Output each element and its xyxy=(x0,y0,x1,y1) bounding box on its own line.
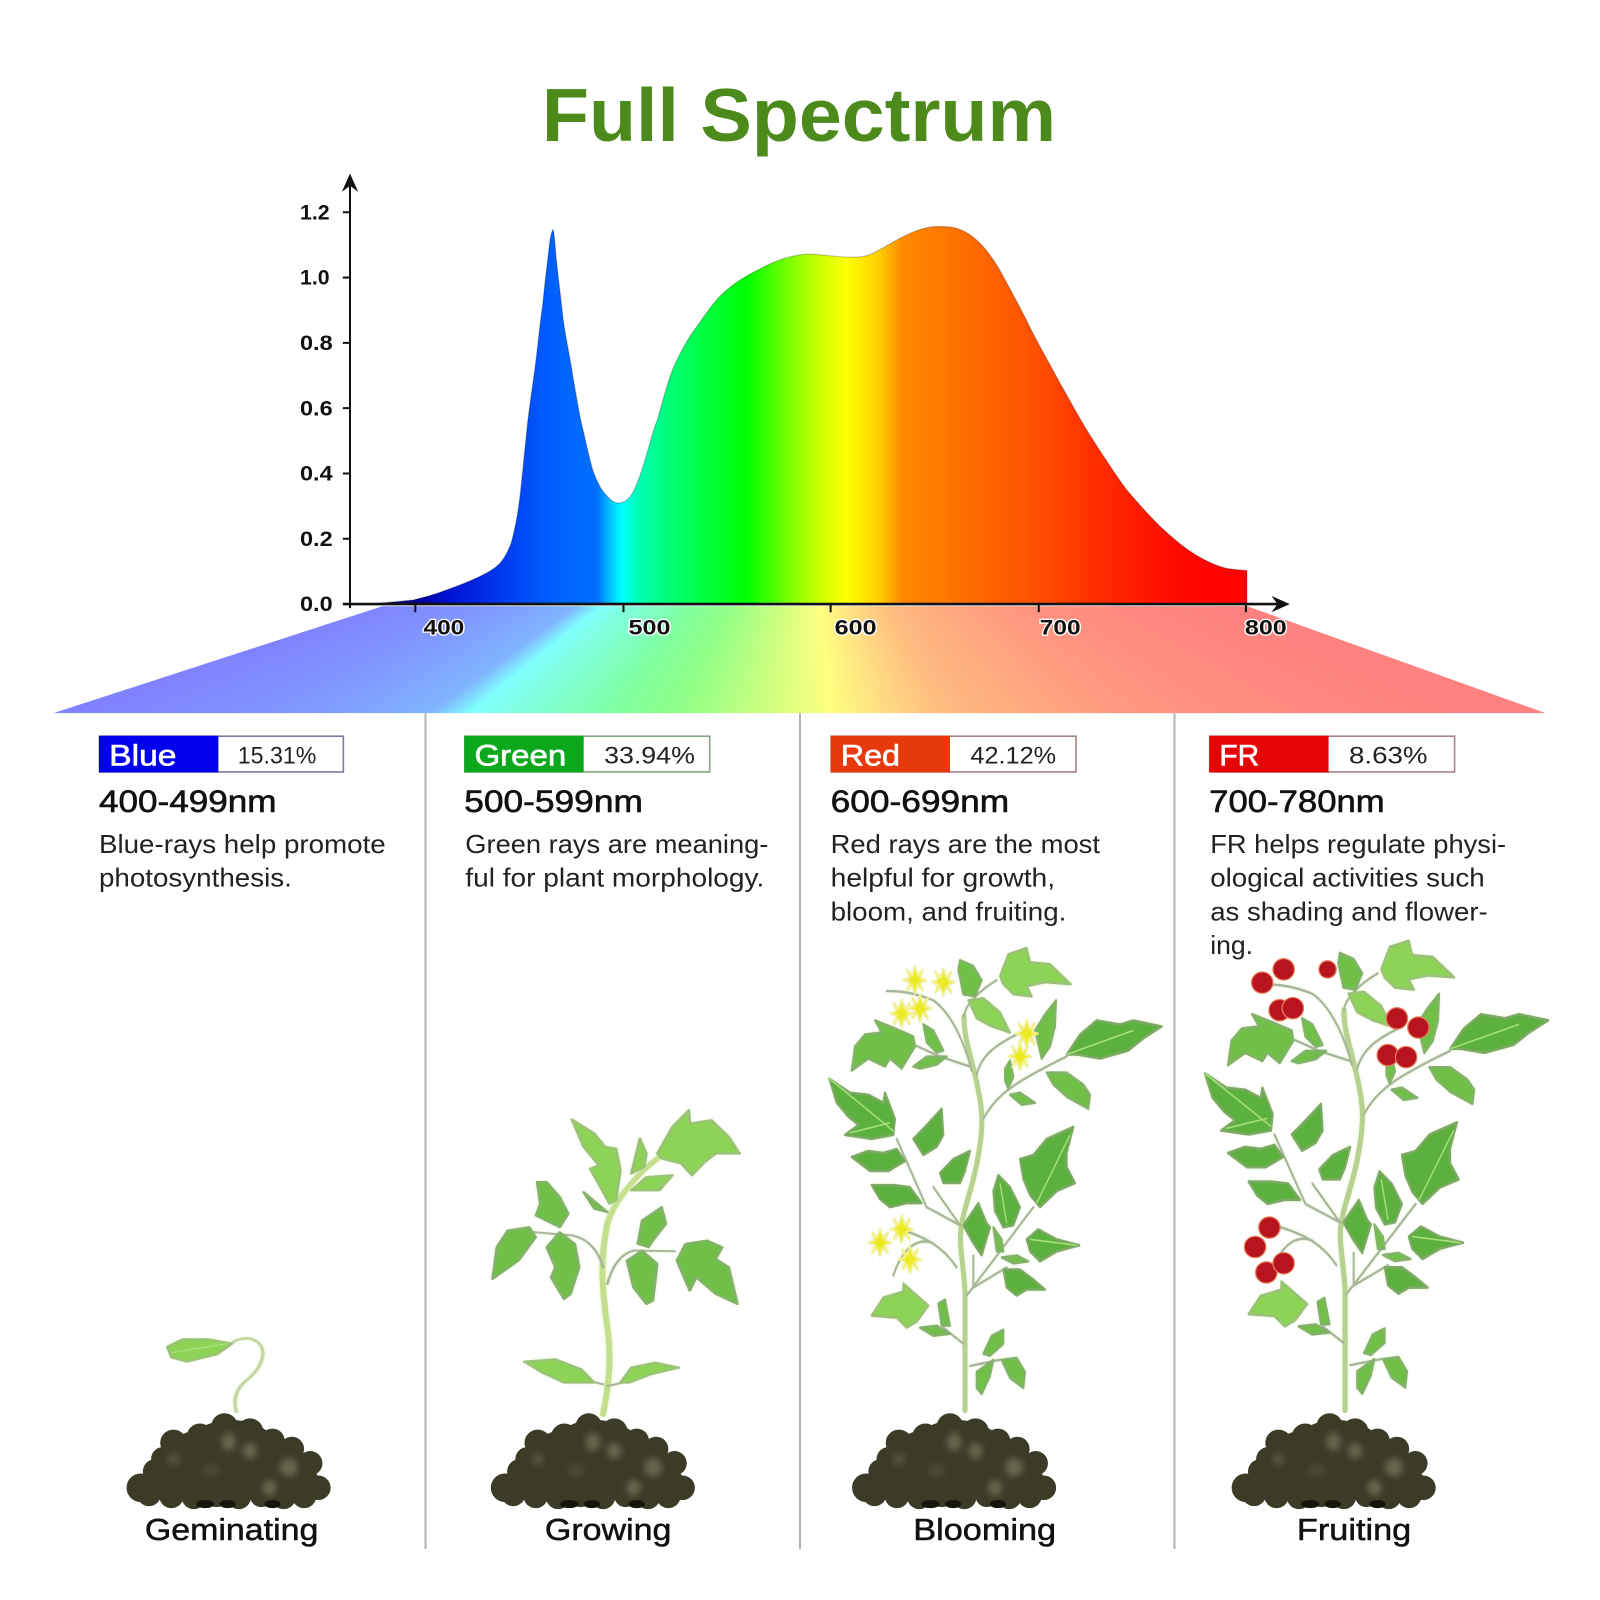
badge: far red: FR xyxy=(1219,739,1259,772)
badge: green: 33.94% xyxy=(604,742,695,769)
x axis: 800 xyxy=(1245,616,1287,640)
x axis xyxy=(343,596,1290,640)
description: Blue-rays help promote xyxy=(99,829,386,859)
badge: red: 42.12% xyxy=(970,742,1056,769)
x axis: 700 xyxy=(1040,616,1081,640)
y axis: 0.6 xyxy=(300,396,333,420)
x axis: 500 xyxy=(629,616,671,640)
badge: green xyxy=(464,736,710,772)
badge: blue: Blue xyxy=(109,739,177,772)
description: photosynthesis. xyxy=(99,863,292,893)
badge: red xyxy=(831,736,1076,772)
description xyxy=(1210,829,1506,960)
panel: red xyxy=(829,736,1162,1547)
illustration: seedling xyxy=(127,1338,331,1509)
x axis: 600 xyxy=(835,616,877,640)
badge: red: Red xyxy=(841,739,900,772)
panel: blue xyxy=(99,736,386,1547)
wavelength range: 500-599nm xyxy=(464,783,643,819)
description: ological activities such xyxy=(1210,863,1485,893)
y axis: 0.0 xyxy=(300,592,333,616)
description: ful for plant morphology. xyxy=(465,863,764,893)
x axis: 400 xyxy=(423,616,464,640)
description: Green rays are meaning- xyxy=(465,829,768,859)
stage label: Geminating xyxy=(145,1513,318,1547)
description xyxy=(831,829,1101,926)
description: as shading and flower- xyxy=(1210,896,1488,926)
description: helpful for growth, xyxy=(831,863,1055,893)
panel: green xyxy=(464,736,768,1547)
description: FR helps regulate physi- xyxy=(1210,829,1506,859)
spectrum fan xyxy=(54,606,1546,714)
illustration: fruiting plant xyxy=(1205,941,1548,1509)
y axis: 0.2 xyxy=(300,527,333,551)
description: ing. xyxy=(1210,930,1253,960)
description xyxy=(465,829,768,893)
badge: blue xyxy=(99,736,343,772)
panel: far red xyxy=(1205,736,1548,1547)
stage label: Growing xyxy=(545,1513,671,1547)
y axis xyxy=(300,173,358,616)
illustration: young plant xyxy=(491,1110,740,1509)
description xyxy=(99,829,386,893)
badge: far red: 8.63% xyxy=(1349,742,1428,769)
description: Red rays are the most xyxy=(831,829,1101,859)
wavelength range: 700-780nm xyxy=(1209,783,1385,819)
y axis: 0.4 xyxy=(300,462,333,486)
y axis: 1.0 xyxy=(300,266,330,290)
chart: spectral distribution xyxy=(300,173,1290,640)
wavelength range: 400-499nm xyxy=(99,783,277,819)
stage label: Blooming xyxy=(913,1513,1056,1547)
badge: green: Green xyxy=(474,739,566,772)
badge: far red xyxy=(1209,736,1455,772)
badge: blue: 15.31% xyxy=(238,742,316,769)
y axis: 1.2 xyxy=(300,200,330,224)
illustration: flowering plant xyxy=(829,948,1162,1509)
description: bloom, and fruiting. xyxy=(831,896,1066,926)
y axis: 0.8 xyxy=(300,331,333,355)
wavelength range: 600-699nm xyxy=(831,783,1009,819)
spectrum curve xyxy=(380,227,1247,604)
stage label: Fruiting xyxy=(1297,1513,1411,1547)
title: Full Spectrum xyxy=(542,74,1056,158)
